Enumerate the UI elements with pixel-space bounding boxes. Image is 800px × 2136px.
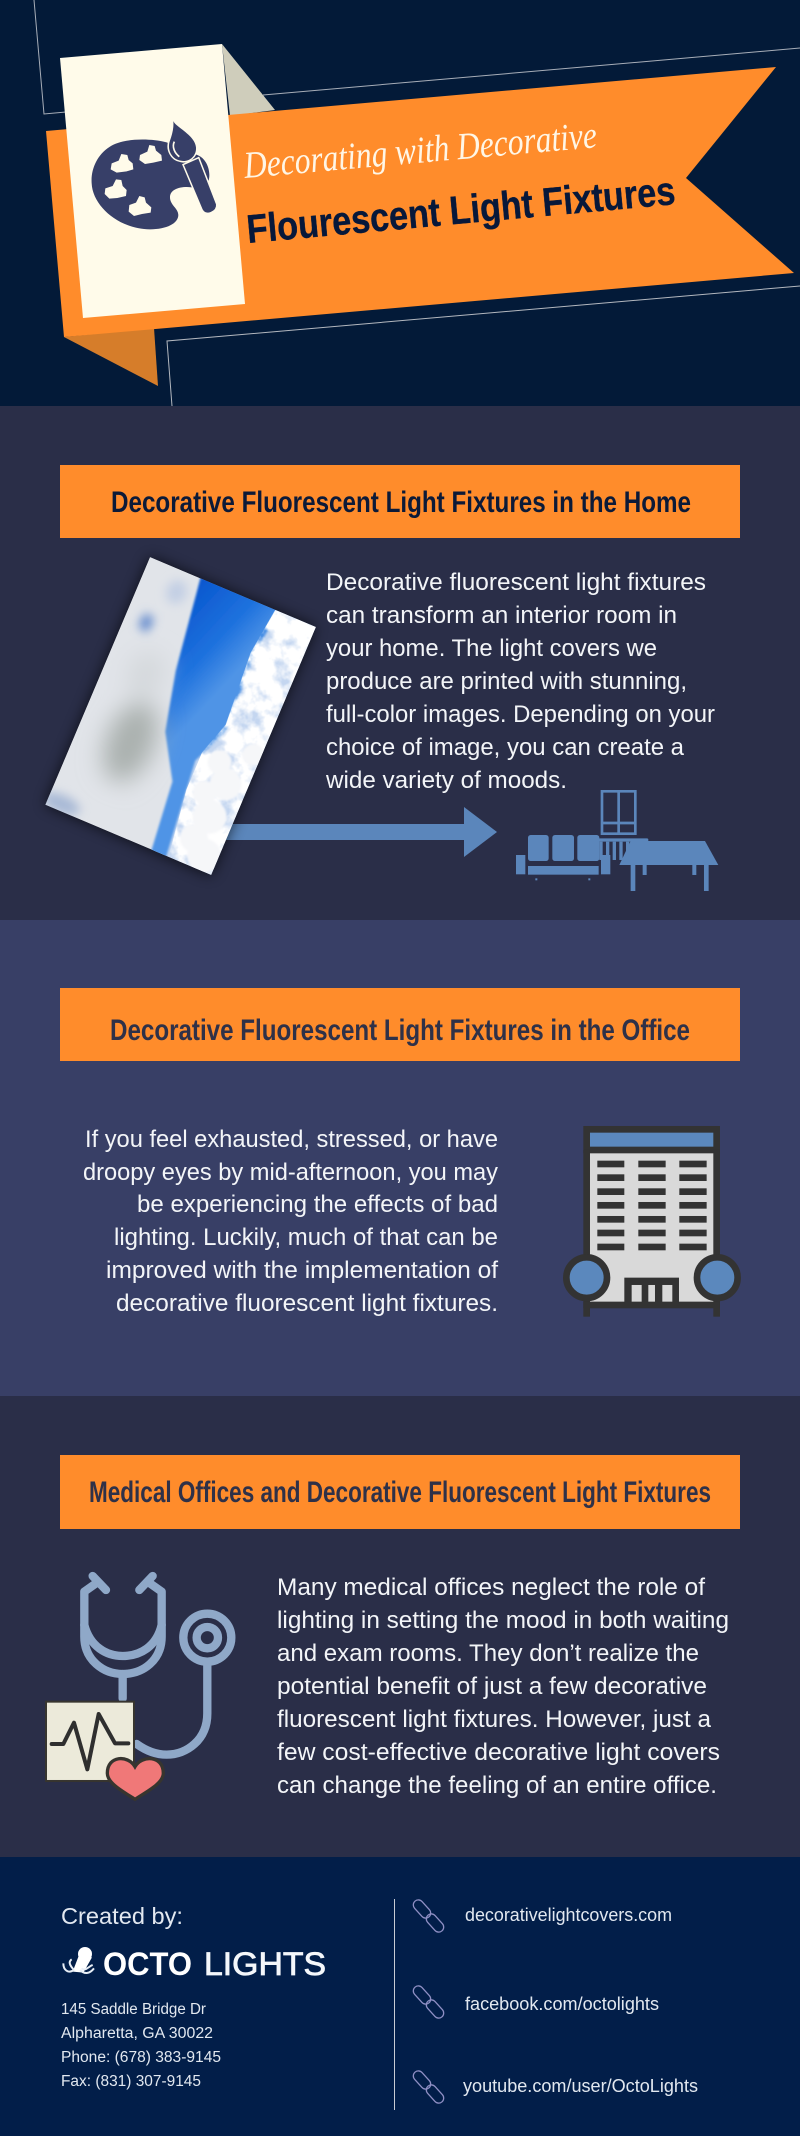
body text: home: Decorative fluorescent light fixtures — [326, 569, 706, 596]
address: 145 Saddle Bridge Dr — [61, 2001, 206, 2018]
body text: home: your home. The light covers we — [326, 635, 657, 662]
banner fold — [64, 328, 158, 386]
panel: medical — [0, 1396, 800, 1857]
icon: living room furniture — [516, 790, 718, 891]
body text: medical: few cost-effective decorative light covers — [277, 1739, 720, 1766]
logo: Octo Lights: LIGHTS — [204, 1946, 326, 1982]
logo: Octo Lights: OCTO — [103, 1946, 192, 1982]
banner subtitle: Decorating with Decorative — [241, 114, 599, 187]
body text: home: full-color images. Depending on your — [326, 701, 715, 728]
body text: medical: Many medical offices neglect the role of — [277, 1574, 705, 1601]
body text: office: decorative fluorescent light fixtures. — [116, 1290, 498, 1317]
body text: home — [325, 569, 715, 794]
body text: medical: fluorescent light fixtures. However, just a — [277, 1706, 712, 1733]
panel: office — [0, 920, 800, 1396]
panel: header banner — [0, 0, 800, 406]
cream tab — [60, 44, 245, 318]
body text: office: improved with the implementation of — [106, 1257, 498, 1284]
heading: home — [60, 465, 740, 538]
body text: medical: and exam rooms. They don’t realize the — [277, 1640, 699, 1667]
body text: home: produce are printed with stunning, — [326, 668, 687, 695]
link: website — [411, 1898, 672, 1934]
body text: home: can transform an interior room in — [326, 602, 677, 629]
created by label: Created by: — [61, 1903, 183, 1929]
body text: home: wide variety of moods. — [325, 767, 567, 794]
panel: footer — [0, 1857, 800, 2136]
address: Phone: (678) 383-9145 — [61, 2049, 221, 2066]
body text: office: lighting. Luckily, much of that can be — [114, 1224, 498, 1251]
link: website: decorativelightcovers.com — [465, 1905, 672, 1925]
heading: medical — [60, 1455, 740, 1529]
link: facebook: facebook.com/octolights — [465, 1994, 659, 2014]
body text: office — [83, 1126, 498, 1317]
arrow — [220, 807, 497, 857]
icon: office building — [566, 1126, 738, 1317]
icon: paint palette and brush — [92, 121, 216, 229]
body text: medical: potential benefit of just a few decorative — [277, 1673, 707, 1700]
body text: home: choice of image, you can create a — [326, 734, 685, 761]
icon: stethoscope with monitor and heart — [46, 1576, 231, 1799]
image: rotated sky light panel — [37, 550, 321, 882]
link: youtube — [411, 2069, 698, 2105]
heading: office — [60, 988, 740, 1061]
logo: Octo Lights — [63, 1946, 326, 1982]
link: facebook — [411, 1984, 659, 2020]
address: Fax: (831) 307-9145 — [61, 2073, 201, 2090]
body text: office: droopy eyes by mid-afternoon, you may — [83, 1159, 498, 1186]
orange ribbon — [46, 67, 794, 337]
body text: medical: lighting in setting the mood in both waiting — [277, 1607, 729, 1634]
body text: medical: can change the feeling of an entire office. — [277, 1772, 717, 1799]
body text: office: be experiencing the effects of bad — [137, 1191, 498, 1218]
cream tab fold — [222, 44, 275, 116]
link: youtube: youtube.com/user/OctoLights — [463, 2076, 698, 2096]
banner title: Flourescent Light Fixtures — [245, 169, 677, 252]
address: Alpharetta, GA 30022 — [61, 2025, 213, 2042]
body text: medical — [277, 1574, 729, 1799]
body text: office: If you feel exhausted, stressed, or have — [85, 1126, 498, 1153]
address — [61, 2001, 221, 2090]
panel: home — [0, 406, 800, 920]
